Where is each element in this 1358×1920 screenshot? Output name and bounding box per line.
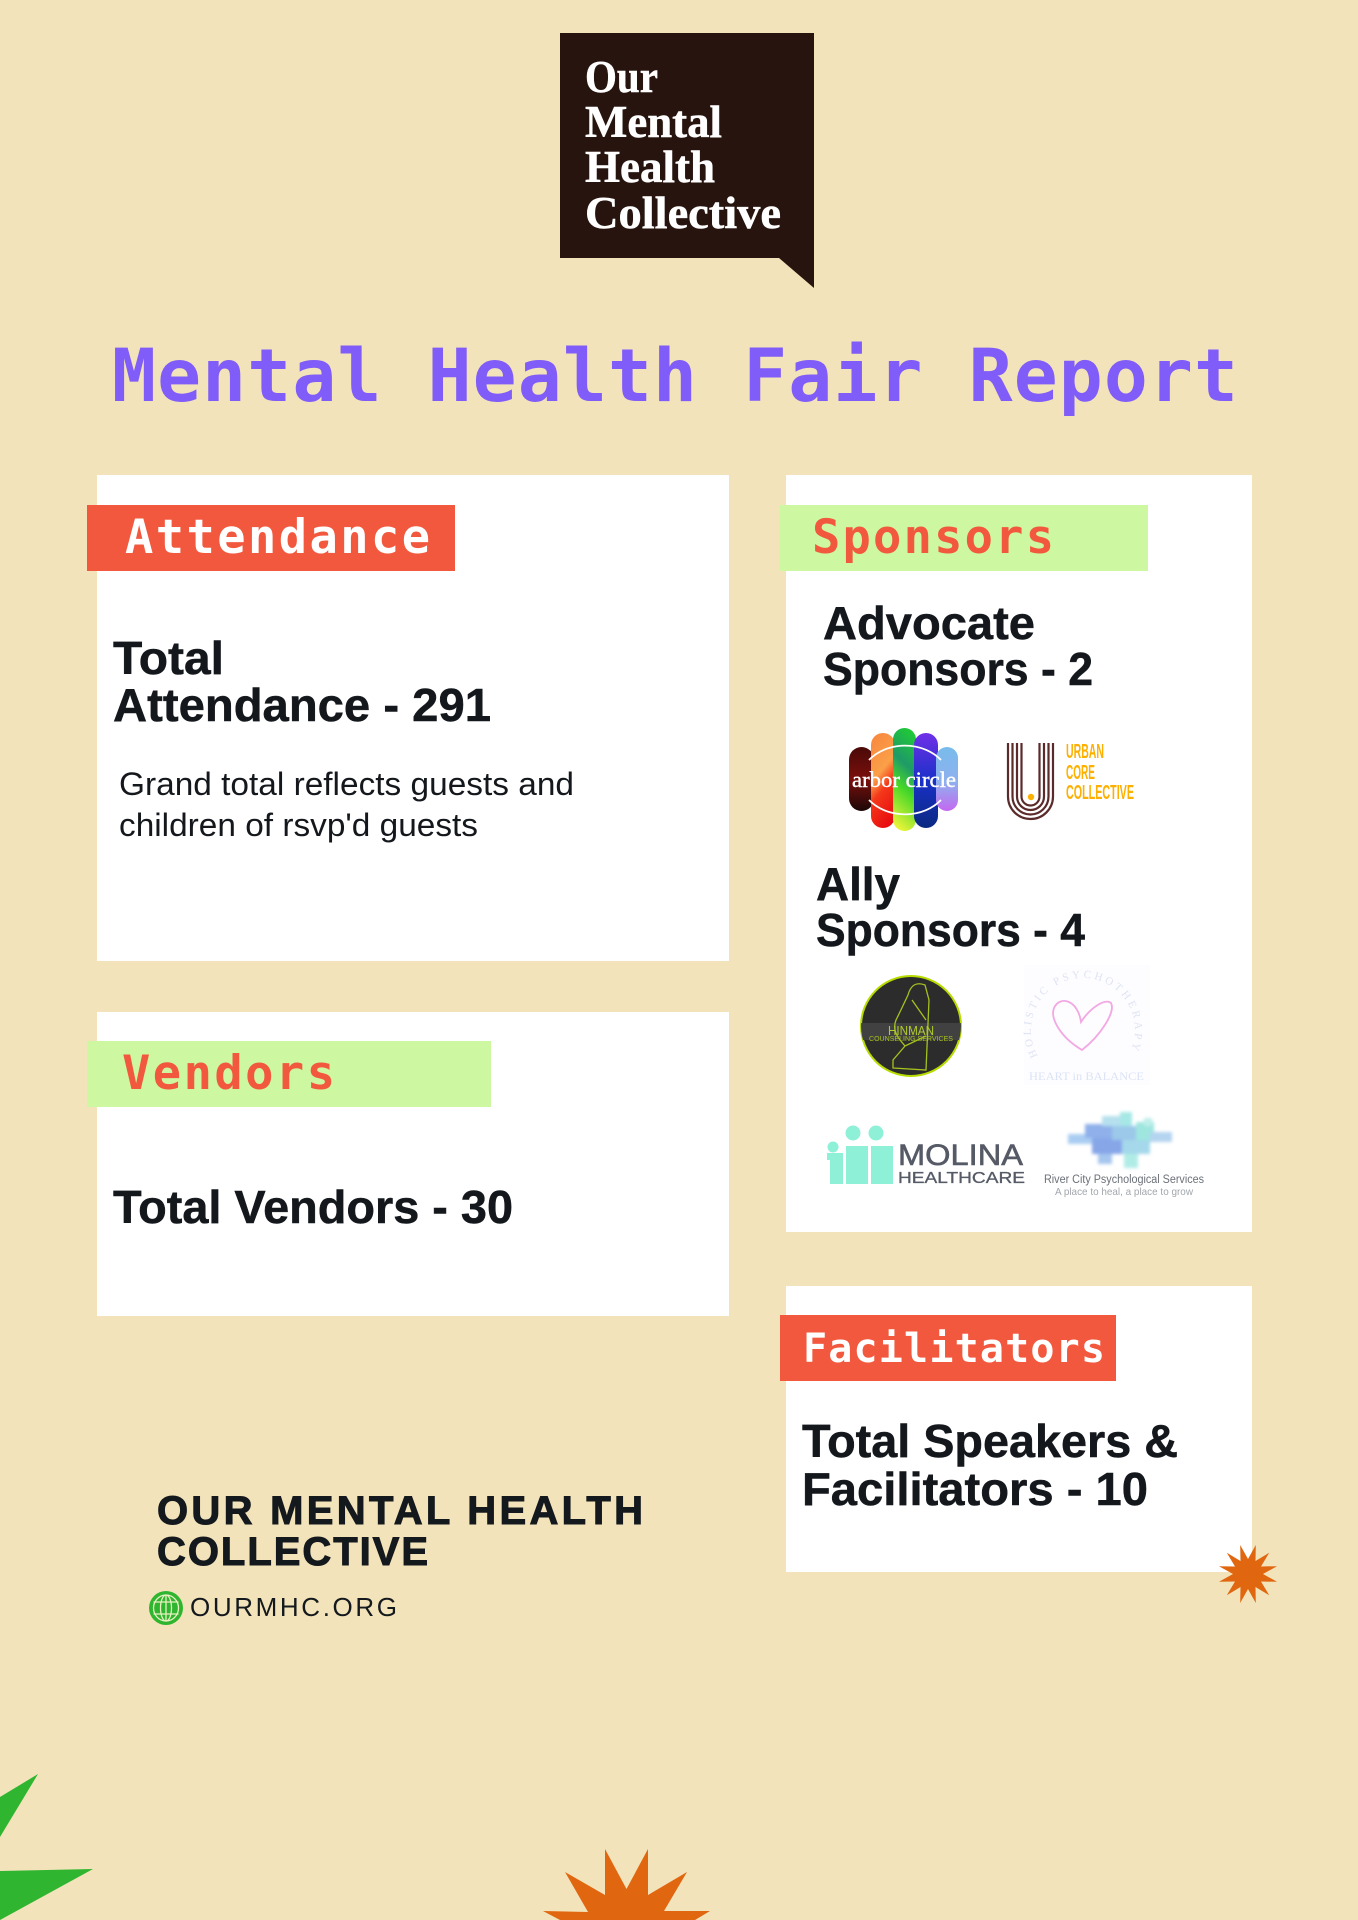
heading: attendance [87, 505, 455, 571]
heading: vendors: Vendors [122, 1046, 335, 1101]
ally sponsors count [816, 858, 1085, 956]
logo: speech bubble [560, 33, 814, 288]
total attendance figure [113, 632, 491, 731]
logo: molina healthcare: MOLINA [898, 1139, 1023, 1172]
title: Mental Health Fair Report [112, 334, 1238, 419]
panel: attendance [87, 475, 729, 961]
logo: heart in balance: HOLISTIC PSYCHOTHERAPY [1024, 970, 1142, 1059]
heading: attendance: Attendance [125, 510, 430, 565]
heading: sponsors [780, 505, 1148, 571]
organisation name: COLLECTIVE [157, 1530, 428, 1574]
logo: speech bubble: Health [585, 142, 715, 192]
icon: green starburst corner [0, 1774, 93, 1920]
logo: hinman counseling services: COUNSELING SERVICES [869, 1036, 953, 1043]
advocate sponsors count [823, 597, 1093, 695]
total vendors figure: Total Vendors - 30 [113, 1181, 513, 1233]
heading: vendors [87, 1041, 491, 1107]
panel: vendors [87, 1012, 729, 1316]
logo: molina healthcare: HEALTHCARE [898, 1170, 1025, 1187]
logo: hinman counseling services [861, 976, 961, 1076]
panel: sponsors [780, 475, 1252, 1232]
organisation name: OUR MENTAL HEALTH [157, 1489, 643, 1533]
logo: arbor circle: arbor circle [852, 767, 956, 792]
attendance note: children of rsvp'd guests [119, 807, 478, 843]
icon: globe [149, 1591, 183, 1625]
logo: speech bubble: Our [585, 52, 658, 102]
heading: facilitators: Facilitators [803, 1326, 1105, 1372]
heading: facilitators [780, 1315, 1116, 1381]
total speakers and facilitators figure: Total Speakers & [802, 1415, 1178, 1467]
icon: orange starburst bottom [543, 1849, 710, 1920]
attendance note [119, 766, 574, 843]
logo: urban core collective: COLLECTIVE [1066, 782, 1134, 804]
website: OURMHC.ORG [190, 1592, 397, 1622]
total attendance figure: Total [113, 632, 224, 684]
total attendance figure: Attendance - 291 [113, 679, 491, 731]
logo: arbor circle [849, 728, 958, 831]
logo: river city psychological services: River City Psychological Services [1044, 1174, 1204, 1186]
total speakers and facilitators figure [802, 1415, 1178, 1515]
heading: sponsors: Sponsors [812, 510, 1054, 565]
icon: small orange starburst [1219, 1545, 1277, 1603]
logo: heart in balance: HEART in BALANCE [1029, 1069, 1144, 1083]
logo: speech bubble: Collective [585, 188, 781, 238]
organisation footer block [149, 1489, 643, 1625]
logo: urban core collective [1008, 741, 1134, 819]
panel: facilitators [780, 1286, 1252, 1572]
logo: speech bubble: Mental [585, 97, 722, 147]
logo: urban core collective: URBAN [1066, 741, 1104, 763]
advocate sponsors count: Advocate [823, 597, 1035, 649]
attendance note: Grand total reflects guests and [119, 766, 574, 802]
organisation name [157, 1489, 643, 1574]
logo: molina healthcare [827, 1126, 1025, 1187]
ally sponsors count: Ally [816, 858, 900, 910]
ally sponsors count: Sponsors - 4 [816, 904, 1085, 956]
logo: urban core collective: CORE [1066, 762, 1095, 784]
advocate sponsors count: Sponsors - 2 [823, 643, 1093, 695]
total speakers and facilitators figure: Facilitators - 10 [802, 1463, 1148, 1515]
logo: hinman counseling services: HINMAN [888, 1023, 934, 1038]
logo: river city psychological services: A place to heal, a place to grow [1055, 1186, 1193, 1198]
logo: river city psychological services [1044, 1112, 1204, 1198]
